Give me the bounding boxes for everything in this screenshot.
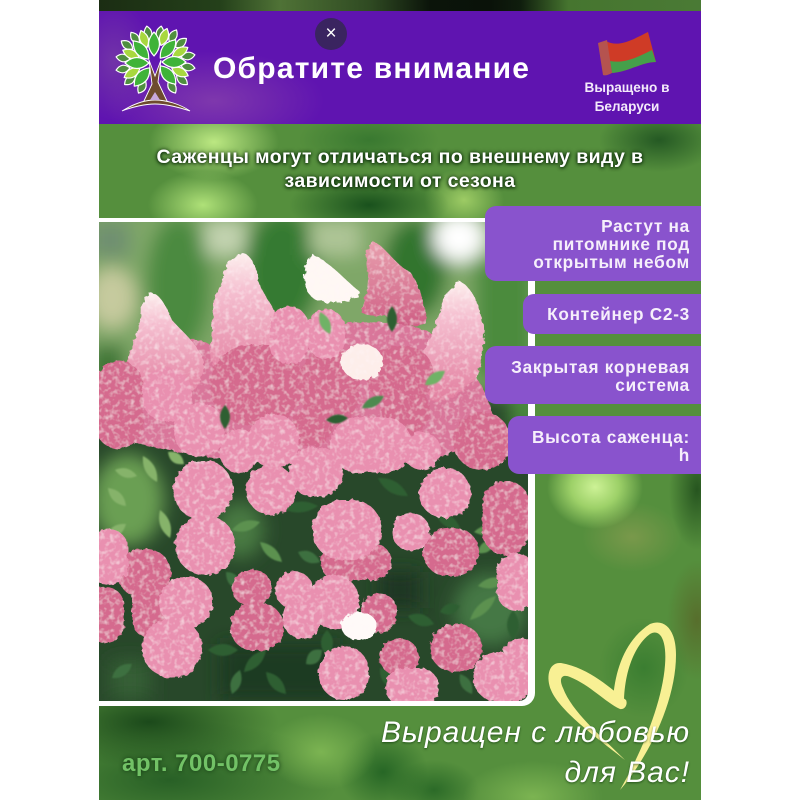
title: Обратите внимание: [213, 52, 530, 85]
tag: closed root system: Закрытая корневая: [511, 357, 690, 377]
tag: closed root system: система: [615, 375, 690, 395]
slogan: для Вас!: [564, 756, 690, 789]
tag: seedling height: Высота саженца:: [532, 427, 690, 447]
subtitle: [154, 146, 645, 192]
label: grown in Belarus: Выращено в: [585, 80, 669, 95]
leaves: [106, 452, 519, 694]
leaves over flowers: [220, 306, 445, 429]
subtitle: зависимости от сезона: [285, 170, 515, 192]
blurred tree background: [80, 205, 550, 400]
tag: grown outdoors: питомнике под: [553, 234, 690, 254]
label: grown in Belarus: [585, 80, 669, 114]
close button: ×: [325, 23, 337, 44]
infographic card: [99, 0, 701, 800]
logo: tree: [116, 26, 196, 112]
tag: grown outdoors: Растут на: [601, 216, 690, 236]
tag: grown outdoors: открытым небом: [533, 252, 690, 272]
top background strip: [99, 0, 701, 11]
photo: blooming hydrangea bush: [99, 218, 535, 706]
slogan: Выращен с любовью: [381, 716, 690, 749]
flower heads: [92, 241, 521, 687]
close button: [315, 18, 347, 50]
tag: container: Контейнер С2-3: [547, 304, 690, 324]
tag: seedling height: [508, 416, 701, 474]
lower foliage tones: [92, 454, 526, 680]
tag: grown outdoors: [485, 206, 701, 281]
subtitle: Саженцы могут отличаться по внешнему виду в: [157, 146, 643, 168]
article number: арт. 700-0775: [122, 750, 281, 777]
header band: [99, 11, 701, 124]
tag: closed root system: [485, 346, 701, 404]
tag: seedling height: h: [679, 445, 690, 465]
icon: Belarus flag: [598, 32, 656, 76]
slogan: [381, 716, 690, 789]
tag: container: [523, 294, 701, 334]
label: grown in Belarus: Беларуси: [595, 98, 659, 114]
